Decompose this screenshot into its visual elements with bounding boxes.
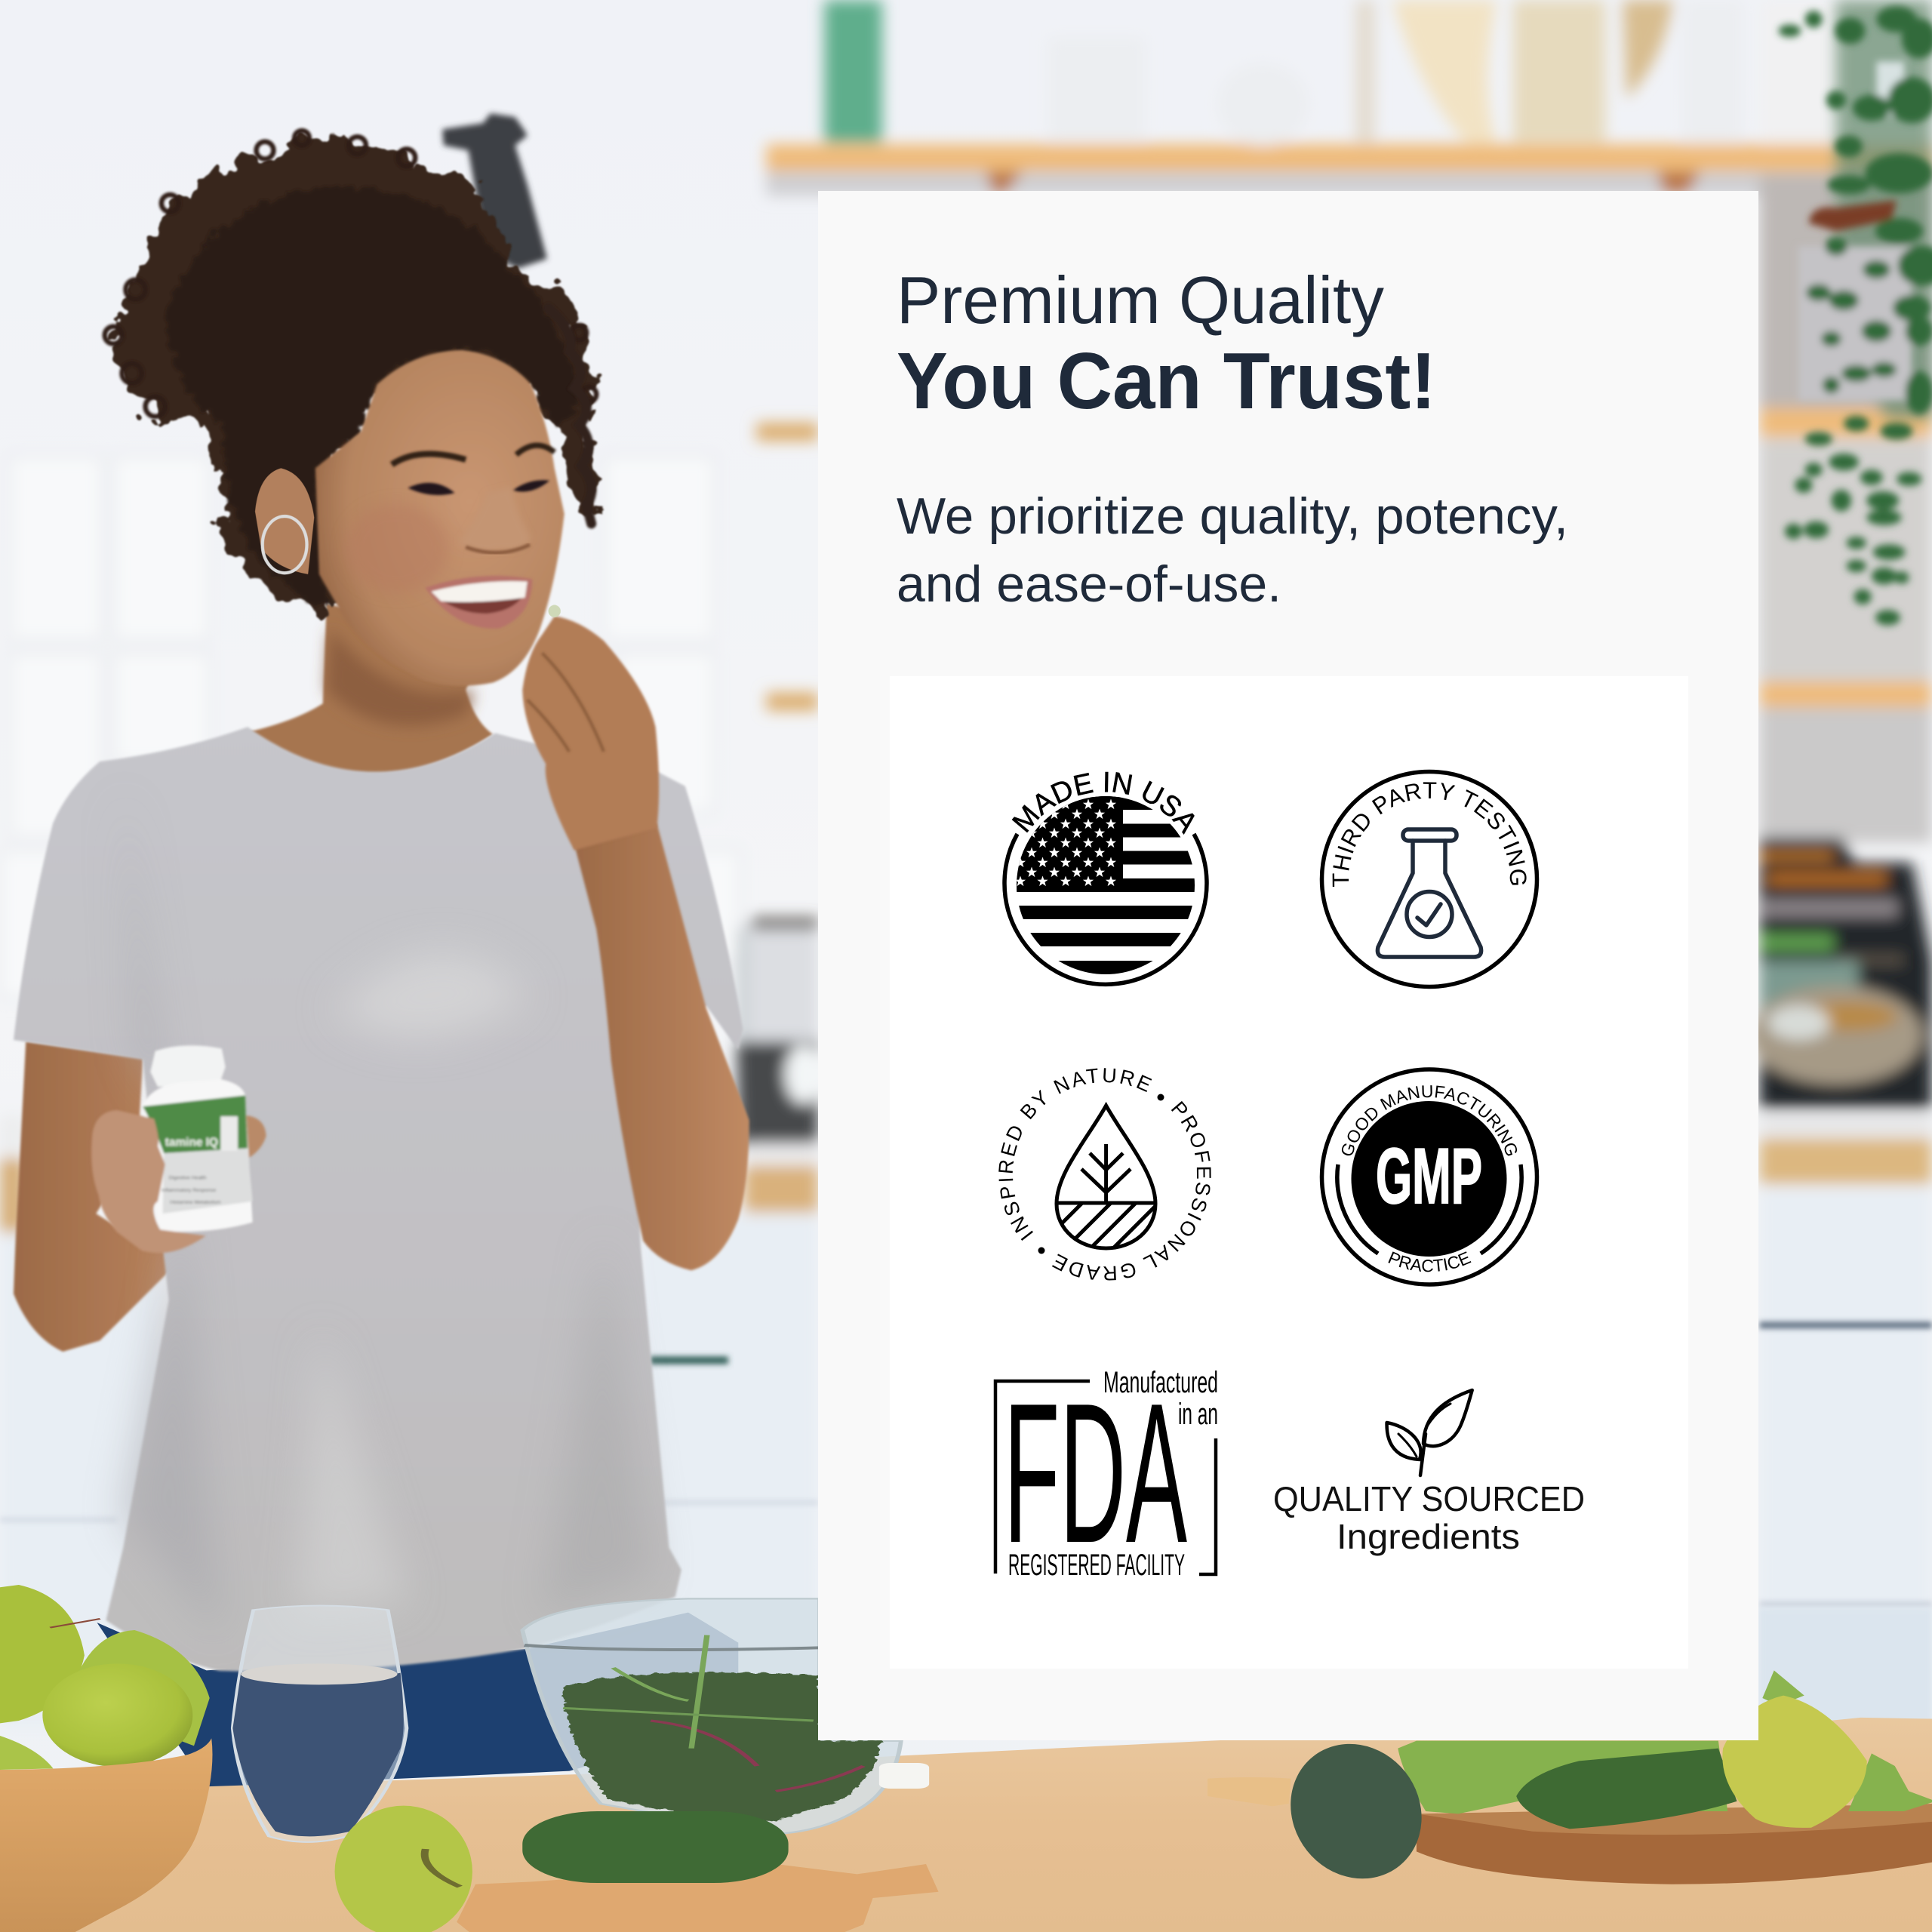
dish in rack bbox=[785, 1044, 822, 1104]
inner arcs bbox=[1337, 1164, 1521, 1254]
label benefits: Histamine Metabolism bbox=[170, 1200, 221, 1205]
ear with hoop bbox=[255, 468, 314, 574]
cabinets bbox=[0, 1186, 1932, 1743]
badge: made in USA bbox=[1002, 771, 1209, 987]
right alcove back wall bbox=[1759, 0, 1932, 843]
GMP text: GMP bbox=[1376, 1133, 1482, 1220]
apple core shadow bbox=[425, 1849, 460, 1887]
neck bbox=[249, 604, 493, 774]
top shelf bbox=[767, 144, 1932, 171]
cutting board bbox=[457, 1864, 939, 1932]
plant foliage wash bbox=[1836, 0, 1932, 419]
left tabletop group bbox=[0, 1585, 939, 1932]
red pot bbox=[1809, 200, 1897, 231]
black disc bbox=[1351, 1101, 1506, 1257]
curly strand bbox=[549, 308, 592, 524]
bottle body bbox=[143, 1079, 253, 1232]
raised arm bbox=[574, 823, 749, 1270]
hair main mass bbox=[166, 186, 579, 610]
badge: FDA registered facility bbox=[995, 1361, 1218, 1584]
finger creases bbox=[528, 653, 604, 752]
grey slatted box bbox=[1798, 247, 1912, 401]
lettuce behind apple bbox=[1762, 1670, 1804, 1706]
apple front bbox=[42, 1663, 192, 1767]
dish rack basket bbox=[737, 1041, 818, 1146]
wooden spoon bbox=[1208, 1777, 1291, 1806]
curved label bottom: PRACTICE bbox=[1388, 1251, 1472, 1272]
book stack backdrop bbox=[1749, 838, 1932, 1109]
right shelves bbox=[1759, 408, 1932, 707]
registered facility: REGISTERED FACILITY bbox=[1008, 1549, 1185, 1582]
panel background bbox=[818, 191, 1758, 1740]
apple stem bbox=[50, 1619, 100, 1628]
in an: in an bbox=[1178, 1398, 1218, 1431]
american flag bbox=[1015, 796, 1195, 974]
board top surface bbox=[1417, 1804, 1932, 1835]
body text: We prioritize quality, potency, bbox=[897, 488, 1568, 545]
badge: inspired by nature bbox=[998, 1068, 1211, 1280]
label benefits: Inflammatory Response bbox=[162, 1188, 216, 1193]
overlay: information panel bbox=[818, 191, 1758, 1740]
water bbox=[232, 1673, 404, 1836]
left shelf stubs bbox=[756, 423, 818, 711]
wooden bowl bbox=[0, 1738, 212, 1932]
hair fringe bbox=[113, 140, 595, 621]
apple back right bbox=[69, 1630, 210, 1746]
apple bbox=[1722, 1696, 1867, 1828]
wall lamp bbox=[442, 113, 547, 269]
chin shadow bbox=[327, 629, 475, 726]
curved label: THIRD PARTY TESTING bbox=[1333, 782, 1527, 887]
shirt shading bbox=[123, 789, 653, 1638]
dish rack frame bbox=[737, 918, 818, 1041]
badge ring bbox=[1004, 834, 1207, 984]
right counter bbox=[1759, 1115, 1932, 1184]
label benefits bbox=[162, 1175, 221, 1205]
water glass bbox=[232, 1605, 407, 1842]
raised hand bbox=[522, 616, 659, 851]
Manufactured: Manufactured bbox=[1103, 1366, 1218, 1399]
white planter bbox=[1876, 62, 1904, 115]
body text bbox=[897, 488, 1568, 613]
lettuce bbox=[1398, 1741, 1727, 1814]
table top bbox=[0, 1718, 1932, 1932]
t-shirt bbox=[14, 727, 743, 1672]
apple on table bbox=[335, 1806, 472, 1932]
salad stems bbox=[563, 1635, 863, 1791]
eyes and brows bbox=[392, 445, 555, 495]
water surface bbox=[241, 1663, 397, 1684]
panel bbox=[818, 191, 1758, 1740]
white label panel bbox=[163, 1149, 253, 1214]
leaves bbox=[1779, 6, 1932, 626]
pill on table bbox=[879, 1763, 929, 1789]
round board bbox=[1417, 1804, 1932, 1884]
glassware on shelf bbox=[1048, 0, 1743, 146]
glass bowl bbox=[522, 1598, 901, 1834]
badge ring bbox=[1322, 771, 1537, 987]
shelf brackets bbox=[986, 171, 1700, 193]
bottle cap neck bbox=[150, 1045, 226, 1087]
green jar bbox=[824, 0, 882, 143]
cream vases on shelf bbox=[1355, 0, 1673, 144]
shelf shadow wall bbox=[767, 171, 1759, 196]
badge: good manufacturing practice bbox=[1319, 1067, 1540, 1287]
smile bbox=[425, 576, 532, 629]
body text: and ease-of-use. bbox=[897, 555, 1281, 613]
heading: bold line: You Can Trust! bbox=[897, 337, 1436, 426]
badges card bbox=[890, 676, 1688, 1669]
hair edge curls bbox=[105, 131, 596, 417]
outer ring bbox=[1322, 1069, 1537, 1284]
badge: quality sourced ingredients bbox=[1273, 1390, 1585, 1556]
badge: FDA registered facility: FDA bbox=[1004, 1361, 1188, 1584]
hanging plant bbox=[1779, 6, 1932, 626]
jeans bbox=[97, 1613, 738, 1787]
curved label: MADE IN USA bbox=[1011, 771, 1195, 835]
right tabletop group bbox=[1208, 1670, 1932, 1884]
quality sourced: QUALITY SOURCED bbox=[1273, 1479, 1585, 1518]
badge: third party testing bbox=[1319, 770, 1540, 989]
bottle name: tamine IQ bbox=[165, 1136, 218, 1149]
flask icon bbox=[1377, 829, 1481, 957]
left arm bbox=[14, 1041, 206, 1352]
lettuce right bbox=[1848, 1753, 1932, 1811]
label facts box bbox=[220, 1116, 238, 1151]
green label bbox=[143, 1095, 248, 1153]
leaf icon bbox=[1387, 1390, 1472, 1475]
face bbox=[315, 350, 565, 686]
curved label top: GOOD MANUFACTURING bbox=[1342, 1085, 1517, 1156]
frame bbox=[995, 1381, 1216, 1574]
fingers bbox=[91, 1110, 206, 1253]
bottle and holding hand bbox=[91, 1045, 266, 1253]
far-left counter bbox=[0, 1115, 25, 1232]
left counter bbox=[744, 1143, 818, 1213]
heading: light line: Premium Quality bbox=[897, 263, 1384, 337]
curved label first part: INSPIRED BY NATURE bbox=[998, 1068, 1152, 1241]
right back wall above table bbox=[1758, 1608, 1932, 1725]
bowl rim band bbox=[525, 1645, 820, 1650]
separator dots bbox=[1038, 1094, 1164, 1254]
cucumber bbox=[522, 1811, 789, 1883]
label benefits: Digestive Health bbox=[169, 1175, 207, 1180]
pill in fingers bbox=[549, 605, 561, 617]
apple low bbox=[0, 1736, 53, 1770]
avocado bbox=[1282, 1742, 1429, 1881]
nose shadow bbox=[466, 545, 530, 552]
water drop tree icon bbox=[1052, 1106, 1158, 1248]
apple back left bbox=[0, 1585, 85, 1723]
cucumber bbox=[1516, 1749, 1737, 1829]
cheek blush bbox=[345, 504, 448, 592]
ingredients: Ingredients bbox=[1337, 1517, 1520, 1556]
salad greens bbox=[563, 1672, 882, 1821]
thumb behind bottle bbox=[240, 1115, 266, 1161]
curved label second part: PROFESSIONAL GRADE bbox=[1052, 1100, 1211, 1280]
wall tiles bbox=[0, 456, 740, 998]
nose bbox=[458, 487, 531, 552]
cabinet handles and seams bbox=[0, 1322, 1932, 1607]
